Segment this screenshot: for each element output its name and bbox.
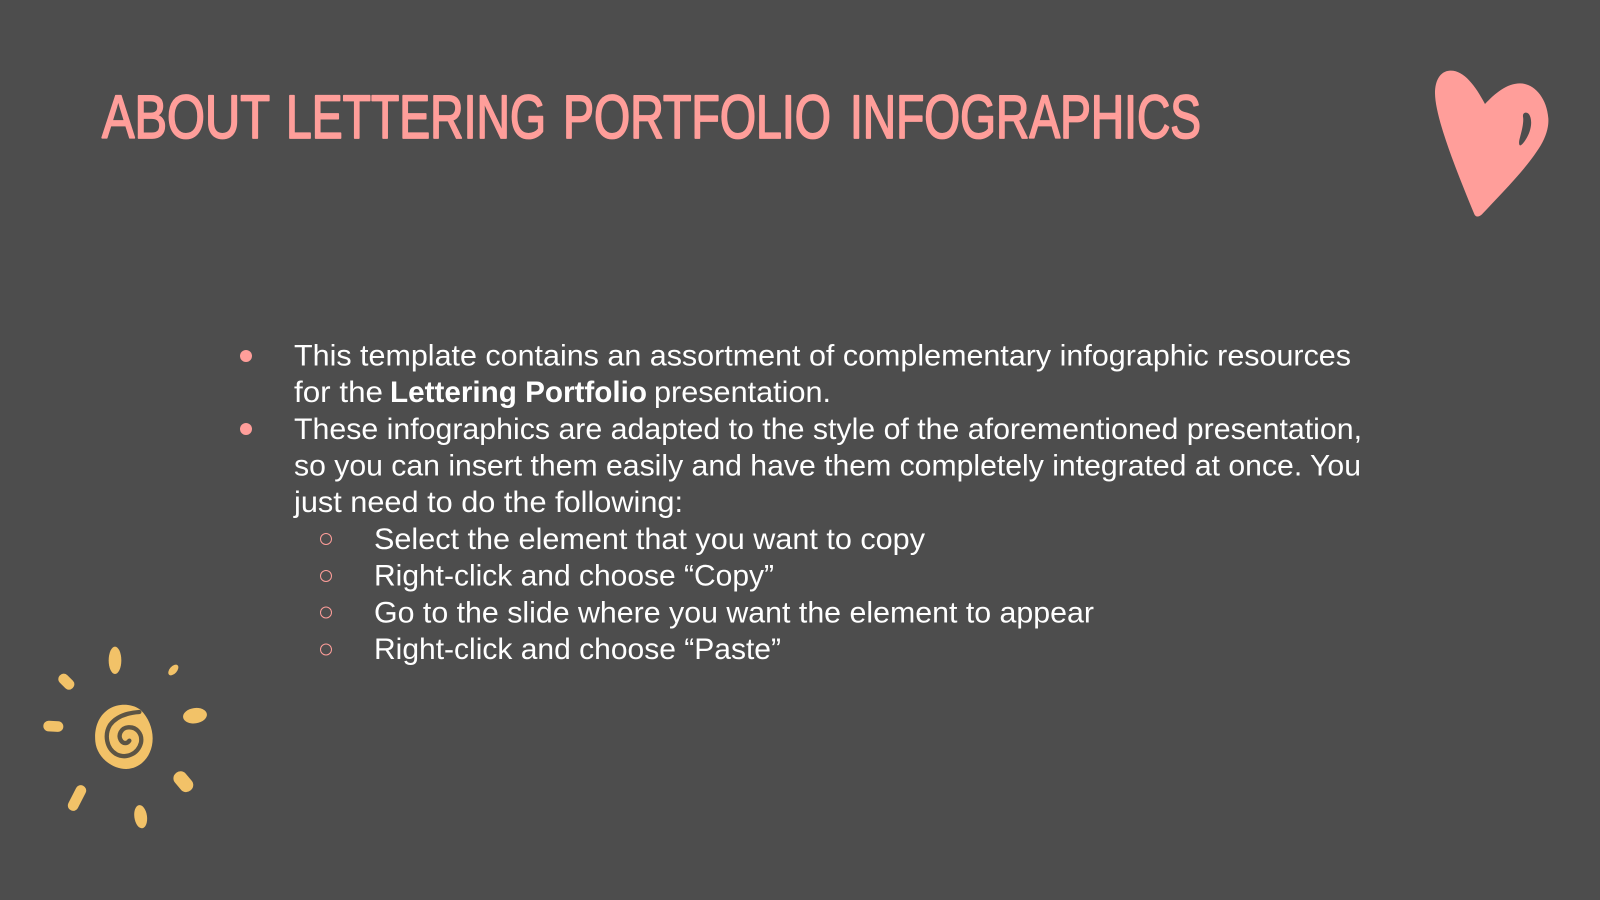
bullet list — [240, 339, 1362, 666]
sub-bullet: select: Select the element that you want to copy — [374, 523, 925, 556]
bullet: adapted infographics — [240, 413, 1362, 519]
bullet: template description: presentation. — [654, 376, 831, 409]
bullet: template description — [240, 339, 1351, 409]
title: LETTERING — [286, 83, 546, 151]
title: INFOGRAPHICS — [850, 83, 1201, 151]
sub-bullet: copy: Right-click and choose “Copy” — [374, 560, 774, 593]
icon: sun — [43, 647, 208, 829]
bullet: template description: Lettering Portfolio — [390, 376, 647, 409]
sub-bullet: go to slide: Go to the slide where you want the element to appear — [374, 596, 1094, 629]
bullet: template description: This template contains an assortment of complementary infographic resources — [294, 339, 1351, 372]
bullet: adapted infographics: just need to do the following: — [293, 486, 683, 519]
icon: heart — [1435, 71, 1548, 217]
bullet: template description: for the — [294, 376, 383, 409]
title: PORTFOLIO — [563, 83, 831, 151]
title: ABOUT — [102, 83, 270, 151]
sub-bullet: paste: Right-click and choose “Paste” — [374, 633, 781, 666]
bullet: adapted infographics: These infographics are adapted to the style of the aforementioned presentation, — [294, 413, 1362, 446]
bullet: adapted infographics: so you can insert them easily and have them completely integrated at once. You — [294, 450, 1361, 482]
title — [102, 83, 1201, 151]
